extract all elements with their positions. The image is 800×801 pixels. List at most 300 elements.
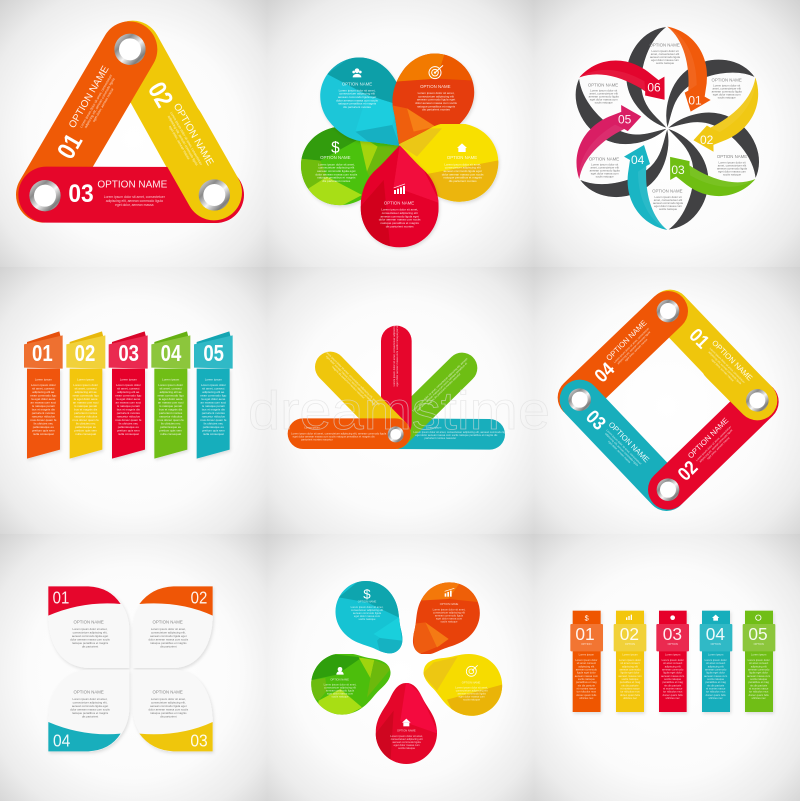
banner 02 xyxy=(66,331,105,459)
column 03: sit amet consect xyxy=(663,661,683,665)
text block 01: eget dolor, aenean massa xyxy=(92,87,114,123)
banner 03: nean commodo ligu xyxy=(115,393,142,397)
text block: orange: dolor aenean massa cum sociis xyxy=(415,101,457,105)
banner 02: 02 xyxy=(75,340,95,366)
eyelet top xyxy=(657,300,679,322)
leaf text: upper left: OPTION NAME xyxy=(588,82,618,87)
card 01 xyxy=(48,586,129,668)
banner 03: bus et magnis dis xyxy=(117,407,140,411)
card 03: OPTION NAME xyxy=(153,689,183,694)
column 04: donec quam felis xyxy=(706,693,726,697)
text block: cyan: sociis natoque xyxy=(359,617,376,621)
text block: green: Lorem ipsum dolor sit amet, xyxy=(324,683,357,687)
leaf text: lower left: amet, consectetuer elit xyxy=(590,166,619,170)
text: yellow strip: magnis dis parturient montes nascetur xyxy=(331,365,366,400)
card 02: OPTION NAME xyxy=(153,619,183,624)
banner 03: Lorem ipsum xyxy=(120,378,137,382)
card 03: natoque penatibus et magnis xyxy=(150,711,187,715)
icon: bar chart xyxy=(394,184,405,194)
eyelet top xyxy=(114,34,146,65)
card 03: consectetuer adipiscing elit, xyxy=(151,700,186,704)
leaf text: bottom: OPTION NAME xyxy=(652,189,683,194)
text: teal strip xyxy=(413,425,509,440)
arrow 06 red xyxy=(579,40,675,120)
arrow numbers: 02 xyxy=(700,133,714,147)
text: orange strip: Lorem ipsum xyxy=(304,426,320,430)
column 02: nt montes nasce xyxy=(620,686,640,690)
text block: green: dolor aenean massa cum sociis xyxy=(315,172,358,176)
banner 04: an massa cum soci xyxy=(158,400,184,404)
leaf text: bottom: sociis natoque xyxy=(659,207,677,211)
petal red xyxy=(374,681,439,766)
text block: cyan: Lorem ipsum dolor sit amet, xyxy=(339,88,376,92)
column 01: ultricies nec xyxy=(579,696,594,700)
card 04: consectetuer adipiscing elit, xyxy=(73,700,108,704)
banner 05: bus et magnis dis xyxy=(202,407,225,411)
leaf text: bottom xyxy=(652,189,683,211)
text block 02: OPTION NAME xyxy=(686,416,730,460)
text block: orange: consectetuer adipiscing elit xyxy=(433,610,465,614)
column 05: penatibus et mag xyxy=(748,680,769,684)
card 01: aenean commodo ligula eget xyxy=(72,634,108,638)
text block: yellow: consectetuer adipiscing elit xyxy=(445,166,481,170)
leaf text: top: Lorem ipsum dolor sit xyxy=(651,49,679,53)
text block: red: sociis natoque xyxy=(398,746,416,750)
text block: cyan: consectetuer adipiscing elit xyxy=(351,608,383,612)
banner 01: pellentesque eu xyxy=(33,425,54,429)
banner 01: bus et magnis dis xyxy=(32,407,55,411)
column 04: tur ridiculus mus xyxy=(706,690,726,694)
column 03: 03 xyxy=(663,624,682,644)
label 03: 03 xyxy=(68,180,94,208)
banner 04: parturient montes xyxy=(159,411,183,415)
text block: cyan: natoque penatibus et magnis xyxy=(338,102,377,106)
leaf text: lower right: amet, consectetuer elit xyxy=(718,163,746,167)
eyelet pivot xyxy=(388,426,404,442)
leaf text: lower left: aenean commodo ligula xyxy=(590,169,620,173)
leaf text: upper left: sociis natoque xyxy=(595,101,613,105)
text block: cyan: OPTION NAME xyxy=(342,82,372,87)
text: teal strip: Lorem ipsum dolor sit amet, consectetuer adipiscing elit, aenean commodo ligula xyxy=(413,430,509,434)
banner 05: Lorem ipsum dolor xyxy=(201,383,226,387)
text block: yellow: Lorem ipsum dolor sit amet, xyxy=(444,162,481,166)
arrow 01 orange xyxy=(667,27,711,112)
banner 05: nascetur ridiculus xyxy=(202,414,225,418)
column 02: sociis natoque xyxy=(622,677,639,681)
banner 03: 03 xyxy=(118,340,139,366)
column 03: adipiscing elit xyxy=(665,664,681,668)
banner 02: la eget dolor aene xyxy=(74,397,98,401)
strip green xyxy=(395,368,462,434)
banner 01 xyxy=(24,331,63,459)
arrow 03 green xyxy=(660,137,755,217)
text block: red: OPTION NAME xyxy=(397,729,416,733)
column 02: Lorem ipsum xyxy=(622,653,638,657)
banner 05: Lorem ipsum xyxy=(205,378,222,382)
panel: triangle diagram xyxy=(29,34,230,211)
text block 03 xyxy=(97,179,168,207)
card 03: aenean commodo ligula eget xyxy=(150,704,187,708)
banner 05: sit amet, consect xyxy=(202,386,225,390)
leaf text: lower right: OPTION NAME xyxy=(717,154,747,159)
banner 03: an massa cum soci xyxy=(116,400,141,404)
arrow 05 magenta xyxy=(558,99,653,179)
banner 04: sit amet, consect xyxy=(159,386,182,390)
band 01 overlap xyxy=(721,364,757,400)
eyelet right xyxy=(199,179,230,211)
leaf text: upper right: OPTION NAME xyxy=(712,78,742,83)
column 03: tur ridiculus mus xyxy=(663,690,683,694)
column 01: sit amet consect xyxy=(577,661,596,665)
label 02: 02 xyxy=(674,457,702,485)
text: orange strip xyxy=(291,426,387,442)
banner 05: pretium quis sem xyxy=(202,428,225,432)
column 01: $ xyxy=(585,613,589,622)
banner 04 xyxy=(151,331,190,459)
petal red xyxy=(359,143,440,249)
arrow numbers: 03 xyxy=(671,163,685,177)
text block: cyan xyxy=(336,82,378,109)
leaf text: upper left: Lorem ipsum dolor sit xyxy=(590,89,617,93)
banner 03: pretium quis sem xyxy=(117,428,140,432)
panel: separated petals xyxy=(309,574,505,766)
leaf text: lower left: eget dolor massa cum xyxy=(591,172,619,176)
text block: green xyxy=(324,677,357,699)
banner 04: Lorem ipsum dolor xyxy=(158,383,183,387)
banner 02: is natoque penati xyxy=(74,404,97,408)
strip teal xyxy=(395,388,490,480)
text block 04: Lorem ipsum dolor sit amet, consectetuer xyxy=(613,327,650,364)
text block: yellow: Lorem ipsum dolor sit amet, xyxy=(455,686,488,690)
banner 02: lis ultricies nec xyxy=(76,421,96,425)
text: green strip: eget dolor aenean massa cum sociis natoque penatibus et xyxy=(416,361,468,412)
text block: green: sociis natoque xyxy=(332,695,349,699)
text block: cyan: dis parturient montes xyxy=(343,105,371,109)
card 03: Lorem ipsum dolor sit amet, xyxy=(151,697,186,701)
column 03: sociis natoque xyxy=(664,677,682,681)
text block 03: Lorem ipsum dolor sit amet, consectetuer xyxy=(104,195,166,199)
card 03: dolor aenean massa cum sociis xyxy=(149,707,189,711)
arrow numbers xyxy=(618,81,714,177)
text block: yellow xyxy=(442,155,484,183)
card 02: aenean commodo ligula eget xyxy=(150,634,187,638)
column 04: nt montes nasce xyxy=(706,686,726,690)
text: yellow strip: eget dolor aenean massa cum sociis natoque penatibus et xyxy=(325,354,376,406)
band 01 orange xyxy=(44,49,129,195)
column 05: nis dis parturie xyxy=(750,683,768,687)
banner 05: la eget dolor aene xyxy=(201,397,226,401)
leaf text: upper left: amet, consectetuer elit xyxy=(589,92,618,96)
text: teal strip: eget dolor aenean massa cum sociis natoque penatibus et magnis dis xyxy=(415,433,498,437)
text block 03: eget dolor, aenean massa xyxy=(115,203,154,207)
column 05: adipiscing elit xyxy=(751,664,767,668)
banner 03: mus donec quam fe xyxy=(115,418,142,422)
banner 03: la eget dolor aene xyxy=(116,397,141,401)
petal yellow xyxy=(397,124,500,206)
column 04: sociis natoque xyxy=(707,677,725,681)
column 04: 04 xyxy=(706,624,725,644)
panel: square ring diagram xyxy=(568,300,769,501)
text block 02: Lorem ipsum dolor sit amet, consectetuer xyxy=(695,425,732,462)
text block: yellow: dis parturient montes xyxy=(449,179,477,183)
text block: cyan: aenean commodo ligula eget xyxy=(338,95,376,99)
column 05: tur ridiculus mus xyxy=(749,690,769,694)
label 02: 02 xyxy=(142,77,178,112)
text block 03: adipiscing elit, aenean commodo ligula xyxy=(604,432,640,467)
card 03 xyxy=(133,670,213,751)
card 02: Lorem ipsum dolor sit amet, xyxy=(151,627,186,631)
leaf text: lower left xyxy=(589,156,620,179)
leaf text: bottom: aenean commodo ligula xyxy=(653,201,683,205)
leaf text: upper right: aenean commodo ligula xyxy=(712,90,742,94)
card 01: Lorem ipsum dolor sit amet, xyxy=(73,627,108,631)
banner 03: adipiscing elit ae xyxy=(117,390,140,394)
banner 02: adipiscing elit ae xyxy=(75,390,97,394)
column 01: Lorem ipsum dolor xyxy=(575,658,597,662)
banner 01: nascetur ridiculus xyxy=(32,414,55,418)
column 05: Lorem ipsum xyxy=(751,653,767,657)
banner 02: nean commodo ligu xyxy=(73,393,99,397)
text: orange strip: parturient montes nascetur xyxy=(301,438,333,442)
leaf text: top: sociis natoque xyxy=(656,61,674,65)
leaf text: top: aenean commodo ligula xyxy=(650,55,680,59)
banner 01: la eget dolor aene xyxy=(31,397,56,401)
text block: orange: eget dolor massa cum xyxy=(436,616,463,620)
text block: orange: natoque penatibus et magnis xyxy=(417,104,456,108)
text block: green: Lorem ipsum dolor sit amet, xyxy=(318,162,355,166)
text block 01: eget dolor, aenean massa xyxy=(710,358,735,383)
text block: orange: OPTION NAME xyxy=(440,602,459,606)
column 04 xyxy=(700,611,732,712)
icon: target xyxy=(429,65,443,79)
column 05: ultricies nec xyxy=(752,696,766,700)
banner 01: adipiscing elit ae xyxy=(32,390,55,394)
column 04: OPTION xyxy=(711,642,721,646)
banner 04: nulla consequat xyxy=(160,432,181,436)
card 02: consectetuer adipiscing elit, xyxy=(151,630,186,634)
column 05: sit amet consect xyxy=(749,661,769,665)
card 02: natoque penatibus et magnis xyxy=(150,641,187,645)
icon: people xyxy=(352,68,362,77)
band 04 orange xyxy=(578,311,668,398)
banner 02: mus donec quam fe xyxy=(73,418,99,422)
column 05: sociis natoque xyxy=(750,677,768,681)
text block: red: consectetuer adipiscing elit xyxy=(391,737,423,741)
banner 03: nulla consequat xyxy=(118,432,139,436)
card 01: dolor aenean massa cum sociis xyxy=(70,637,110,641)
leaf text: upper left xyxy=(588,82,619,105)
text block: red xyxy=(390,729,423,750)
banner 05: adipiscing elit ae xyxy=(202,390,225,394)
column 02: 02 xyxy=(620,624,639,644)
banner 02: pellentesque eu xyxy=(75,425,97,429)
leaf text: upper left: aenean commodo ligula xyxy=(589,95,619,99)
leaf text: upper right: amet, consectetuer elit xyxy=(712,87,741,91)
column 03: OPTION xyxy=(668,642,678,646)
column 05: ligula eget dolor xyxy=(749,671,768,675)
banner 01: mus donec quam fe xyxy=(30,418,57,422)
text block: green: aenean commodo ligula eget xyxy=(317,169,356,173)
text block: cyan: aenean commodo ligula xyxy=(353,611,382,615)
card 03: 03 xyxy=(190,731,208,751)
column 05: aenean massa cum xyxy=(747,675,771,678)
text block: green: natoque penatibus et magnis xyxy=(317,176,356,180)
leaf text: top xyxy=(650,43,680,65)
banner 03: is natoque penati xyxy=(117,404,140,408)
panel: swirl of six arrows xyxy=(558,27,777,230)
column 01: nis dis parturie xyxy=(578,683,595,687)
column 03: ligula eget dolor xyxy=(663,671,682,675)
text: yellow strip: Lorem ipsum dolor sit amet, consectetuer adipiscing elit, aenean xyxy=(324,350,381,407)
text block: cyan: OPTION NAME xyxy=(358,600,377,604)
column 01: Lorem ipsum xyxy=(579,653,595,657)
card 04: dis parturient xyxy=(82,714,98,718)
icon: bar chart xyxy=(445,588,454,597)
text block 01: OPTION NAME xyxy=(710,338,754,383)
band 03 teal xyxy=(580,400,667,491)
banner 01: Lorem ipsum xyxy=(35,378,52,382)
column 03: aenean commodo xyxy=(662,667,684,671)
text block 01: Lorem ipsum dolor sit amet, consectetuer xyxy=(709,347,746,384)
banner 05: 05 xyxy=(203,340,224,366)
column 04: sit amet consect xyxy=(706,661,726,665)
icon: target xyxy=(466,665,478,676)
banner 04: mus donec quam fe xyxy=(158,418,184,422)
column 01: aenean commodo xyxy=(576,667,597,671)
text block: cyan xyxy=(351,600,384,621)
panel: five columns xyxy=(570,611,775,712)
text: red strip xyxy=(392,320,399,387)
column 05: nt montes nasce xyxy=(749,686,769,690)
leaf text: upper right: Lorem ipsum dolor sit xyxy=(713,84,740,88)
banner 03: pellentesque eu xyxy=(118,425,139,429)
text: red strip: eget dolor aenean massa cum sociis natoque penatibus xyxy=(395,320,399,387)
icon: people xyxy=(336,667,344,675)
text block 02: OPTION NAME xyxy=(171,102,215,168)
card 04: natoque penatibus et magnis xyxy=(72,711,109,715)
text block: yellow: dolor aenean massa cum sociis xyxy=(442,172,484,176)
leaf text: lower right: Lorem ipsum dolor sit xyxy=(718,160,746,164)
column 03: donec quam felis xyxy=(663,693,683,697)
column 01: donec quam felis xyxy=(576,693,597,697)
text: green strip: Lorem ipsum dolor sit amet, consectetuer adipiscing elit, aenean xyxy=(411,356,469,412)
text block 03: eget dolor, aenean massa xyxy=(607,439,632,464)
text block 04: adipiscing elit, aenean commodo ligula xyxy=(616,330,652,365)
column 04: aenean massa cum xyxy=(704,675,728,678)
text block: red: consectetuer adipiscing elit xyxy=(382,211,418,215)
banner 03: nascetur ridiculus xyxy=(117,414,140,418)
icon: house xyxy=(457,143,467,152)
text block: orange: aenean commodo ligula eget xyxy=(417,98,455,102)
text block: red: dolor aenean massa cum sociis xyxy=(379,218,421,222)
column 03: penatibus et mag xyxy=(662,680,683,684)
banner 03: parturient montes xyxy=(117,411,140,415)
banner 04: bus et magnis dis xyxy=(159,407,183,411)
strip red xyxy=(350,341,442,424)
text block 01: adipiscing elit, aenean commodo ligula xyxy=(707,350,743,386)
banner 01: lis ultricies nec xyxy=(34,421,54,425)
column 01: tur ridiculus mus xyxy=(577,690,597,694)
text block: yellow: sociis natoque xyxy=(463,698,481,702)
arrow numbers: 06 xyxy=(647,81,661,95)
leaf text: top: amet, consectetuer elit xyxy=(651,52,679,56)
column 02: OPTION xyxy=(625,642,635,646)
band 03 red xyxy=(46,111,216,279)
eyelet left xyxy=(29,180,61,211)
icon: dollar: $ xyxy=(363,586,371,601)
banner 01: nean commodo ligu xyxy=(30,393,57,397)
petal orange xyxy=(392,54,476,144)
card 01: dis parturient xyxy=(82,644,98,648)
text block: yellow: aenean commodo ligula eget xyxy=(444,169,482,173)
banner 01: is natoque penati xyxy=(32,404,55,408)
banner 05: nean commodo ligu xyxy=(200,393,227,397)
text block 03: OPTION NAME xyxy=(607,420,651,464)
text block: red: natoque penatibus et magnis xyxy=(381,221,419,225)
leaf text: lower right: aenean commodo ligula xyxy=(717,166,747,170)
column 01: ligula eget dolor xyxy=(577,671,596,675)
banner 04: pellentesque eu xyxy=(160,425,182,429)
leaf text: bottom: eget dolor massa cum xyxy=(654,204,683,208)
card 01: natoque penatibus et magnis xyxy=(72,641,109,645)
text block: orange: consectetuer adipiscing elit xyxy=(418,94,454,98)
column 02: aenean commodo xyxy=(619,667,641,671)
text block 02: adipiscing elit, aenean commodo ligula xyxy=(167,115,199,166)
banner 01: parturient montes xyxy=(32,411,55,415)
text block: orange: sociis natoque xyxy=(441,619,458,623)
banner 04: pretium quis sem xyxy=(159,428,183,432)
petal green xyxy=(301,127,400,208)
banner 05: an massa cum soci xyxy=(201,400,226,404)
text block: yellow: aenean commodo ligula xyxy=(458,692,486,696)
text block: red: aenean commodo ligula xyxy=(393,740,421,744)
column 05: Lorem ipsum dolor xyxy=(748,658,770,662)
text block 03: adipiscing elit, aenean commodo ligula xyxy=(106,199,163,203)
text block: green: OPTION NAME xyxy=(320,155,351,160)
text block: red: Lorem ipsum dolor sit amet, xyxy=(390,734,423,738)
leaf text: bottom: Lorem ipsum dolor sit xyxy=(654,195,682,199)
banner 04: nean commodo ligu xyxy=(158,393,184,397)
banner 01: sit amet, consect xyxy=(32,386,55,390)
card 04: OPTION NAME xyxy=(74,689,104,694)
banner 03: sit amet, consect xyxy=(117,386,140,390)
card 04: 04 xyxy=(53,731,71,751)
column 01: sociis natoque xyxy=(578,677,595,681)
text block 01: OPTION NAME xyxy=(67,64,112,130)
arrow 02 yellow xyxy=(682,77,777,158)
card 02: dolor aenean massa cum sociis xyxy=(149,637,189,641)
text block: green: dis parturient montes xyxy=(322,179,351,183)
column 01: nt montes nasce xyxy=(577,686,597,690)
text block: orange: Lorem ipsum dolor sit amet, xyxy=(433,607,466,611)
banner 05: mus donec quam fe xyxy=(200,418,227,422)
column 03: ultricies nec xyxy=(666,696,680,700)
banner 02: Lorem ipsum dolor xyxy=(73,383,98,387)
text block: yellow xyxy=(455,680,488,702)
panel: four leaf cards xyxy=(48,586,213,751)
banner 02: sit amet, consect xyxy=(74,386,97,390)
arrow numbers: 01 xyxy=(688,93,702,107)
banner 02: nulla consequat xyxy=(75,432,96,436)
text block: cyan: consectetuer adipiscing elit xyxy=(339,92,375,96)
text block: red: eget dolor massa cum xyxy=(394,743,421,747)
label 01: 01 xyxy=(685,325,713,353)
column 04: nis dis parturie xyxy=(707,683,725,687)
text block: green: consectetuer adipiscing elit xyxy=(324,686,356,690)
leaf text: upper right: sociis natoque xyxy=(718,96,736,100)
card 02: 02 xyxy=(191,587,207,607)
label 01: 01 xyxy=(52,129,88,164)
